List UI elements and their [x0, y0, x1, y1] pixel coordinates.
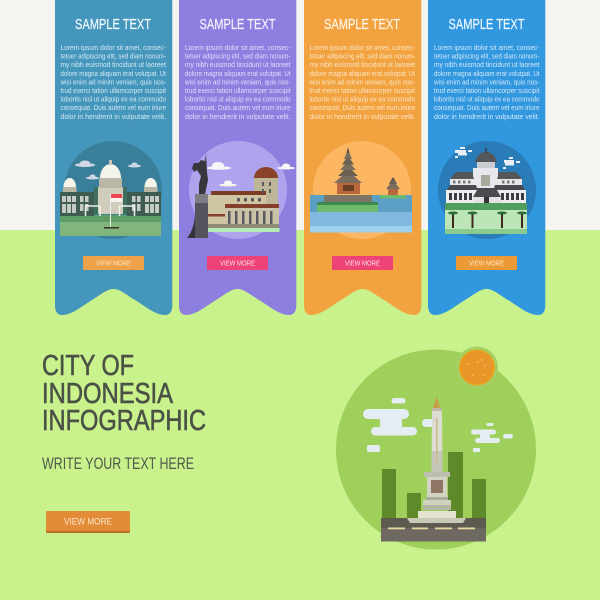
text block: lorem 3: dolor in hendrerit in vulputate velit. — [310, 112, 415, 121]
text block: lorem 2: tetuer adipiscing elit, sed diam nonum- — [185, 52, 291, 61]
text block: lorem 2: my nibh euismod tincidunt ut laoreet — [185, 60, 290, 69]
illustration: lake temple pagoda — [310, 141, 412, 239]
text block: lorem 2: wisi enim ad minim veniam, quis nos- — [184, 77, 291, 86]
title: INFOGRAPHIC — [42, 405, 206, 437]
text block: lorem 1: dolor in hendrerit in vulputate velit. — [60, 112, 166, 121]
button: view more 1: VIEW MORE — [96, 258, 131, 268]
text block: lorem 2: lobortis nisl ut aliquip ex ea commodo — [185, 95, 290, 104]
text block: lorem 3: my nibh euismod tincidunt ut laoreet — [310, 60, 415, 69]
text block: lorem 4: tetuer adipiscing elit, sed diam nonum- — [434, 52, 540, 61]
text block: lorem 2 — [184, 43, 291, 121]
green circle backdrop — [336, 350, 536, 550]
text block: lorem 3: lobortis nisl ut aliquip ex ea commodo — [310, 95, 415, 104]
text block: lorem 2: Lorem ipsum dolor sit amet, consec- — [185, 43, 291, 52]
panel: purple ribbon 2 — [179, 0, 296, 315]
text block: lorem 1: lobortis nisl ut aliquip ex ea commodo — [60, 95, 166, 104]
text block: lorem 1: consequat. Duis autem vel eum iriure — [60, 103, 166, 112]
button: view more 4 — [456, 256, 517, 270]
text block: lorem 4: consequat. Duis autem vel eum iriure — [434, 103, 540, 112]
button: view more 3: VIEW MORE — [345, 258, 380, 268]
text block: lorem 1: tetuer adipiscing elit, sed diam nonum- — [60, 52, 167, 61]
text block: lorem 4 — [433, 43, 540, 121]
illustration: parliament dome building — [60, 141, 162, 239]
title — [42, 350, 206, 437]
button: view more 2 — [207, 256, 268, 270]
illustration: monument scene — [336, 346, 536, 550]
text block: lorem 1: wisi enim ad minim veniam, quis nos- — [60, 77, 167, 86]
text block: lorem 1: dolore magna aliquam erat volutpat. Ut — [60, 69, 166, 78]
illustration: statue and colonial building — [187, 141, 295, 239]
text block: lorem 2: consequat. Duis autem vel eum iriure — [185, 103, 290, 112]
dark green city buildings — [382, 452, 486, 521]
text block: lorem 4: dolore magna aliquam erat volutpat. Ut — [434, 69, 540, 78]
text block: lorem 3: trud exerci tation ullamcorper suscipit — [310, 86, 415, 95]
text block: lorem 1: trud exerci tation ullamcorper suscipit — [60, 86, 166, 95]
text block: lorem 3: wisi enim ad minim veniam, quis nos- — [309, 77, 416, 86]
text block: lorem 4: Lorem ipsum dolor sit amet, consec- — [434, 43, 540, 52]
button: view more 1 — [83, 256, 144, 270]
button: view more 3 — [332, 256, 393, 270]
button: main view more — [46, 511, 130, 533]
text block: lorem 1: Lorem ipsum dolor sit amet, consec- — [60, 43, 167, 52]
heading: sample text 4: SAMPLE TEXT — [448, 16, 524, 33]
heading: sample text 1: SAMPLE TEXT — [75, 16, 151, 33]
text block: lorem 3: Lorem ipsum dolor sit amet, consec- — [310, 43, 416, 52]
title: CITY OF — [42, 350, 134, 382]
text block: lorem 3: consequat. Duis autem vel eum iriure — [310, 103, 415, 112]
panel: orange ribbon 3 — [304, 0, 421, 315]
text block: lorem 1 — [60, 43, 167, 121]
clouds — [363, 398, 513, 452]
text block: lorem 4: wisi enim ad minim veniam, quis nos- — [433, 77, 540, 86]
text block: lorem 3 — [309, 43, 416, 121]
button: view more 4: VIEW MORE — [469, 258, 504, 268]
icon: sun — [456, 346, 498, 388]
heading: sample text 3: SAMPLE TEXT — [324, 16, 400, 33]
title: INDONESIA — [42, 378, 174, 410]
text block: lorem 4: trud exerci tation ullamcorper suscipit — [434, 86, 540, 95]
button: view more 2: VIEW MORE — [220, 258, 255, 268]
text block: lorem 4: my nibh euismod tincidunt ut laoreet — [434, 60, 540, 69]
panel: blue ribbon 1 — [55, 0, 172, 315]
text block: lorem 4: lobortis nisl ut aliquip ex ea commodo — [434, 95, 540, 104]
text block: lorem 3: tetuer adipiscing elit, sed diam nonum- — [310, 52, 416, 61]
text block: lorem 2: dolore magna aliquam erat volutpat. Ut — [185, 69, 290, 78]
heading: sample text 2: SAMPLE TEXT — [200, 16, 276, 33]
text block: lorem 1: my nibh euismod tincidunt ut laoreet — [60, 60, 166, 69]
monument obelisk — [407, 396, 466, 523]
road — [381, 518, 486, 542]
text block: lorem 2: dolor in hendrerit in vulputate velit. — [185, 112, 290, 121]
text block: lorem 2: trud exerci tation ullamcorper suscipit — [185, 86, 290, 95]
panel: bright blue ribbon 4 — [428, 0, 545, 315]
subtitle: WRITE YOUR TEXT HERE — [42, 455, 194, 473]
text block: lorem 3: dolore magna aliquam erat volutpat. Ut — [310, 69, 415, 78]
text block: lorem 4: dolor in hendrerit in vulputate velit. — [434, 112, 540, 121]
illustration: Gedung Sate style building — [438, 141, 536, 239]
button: main view more: VIEW MORE — [64, 516, 112, 528]
